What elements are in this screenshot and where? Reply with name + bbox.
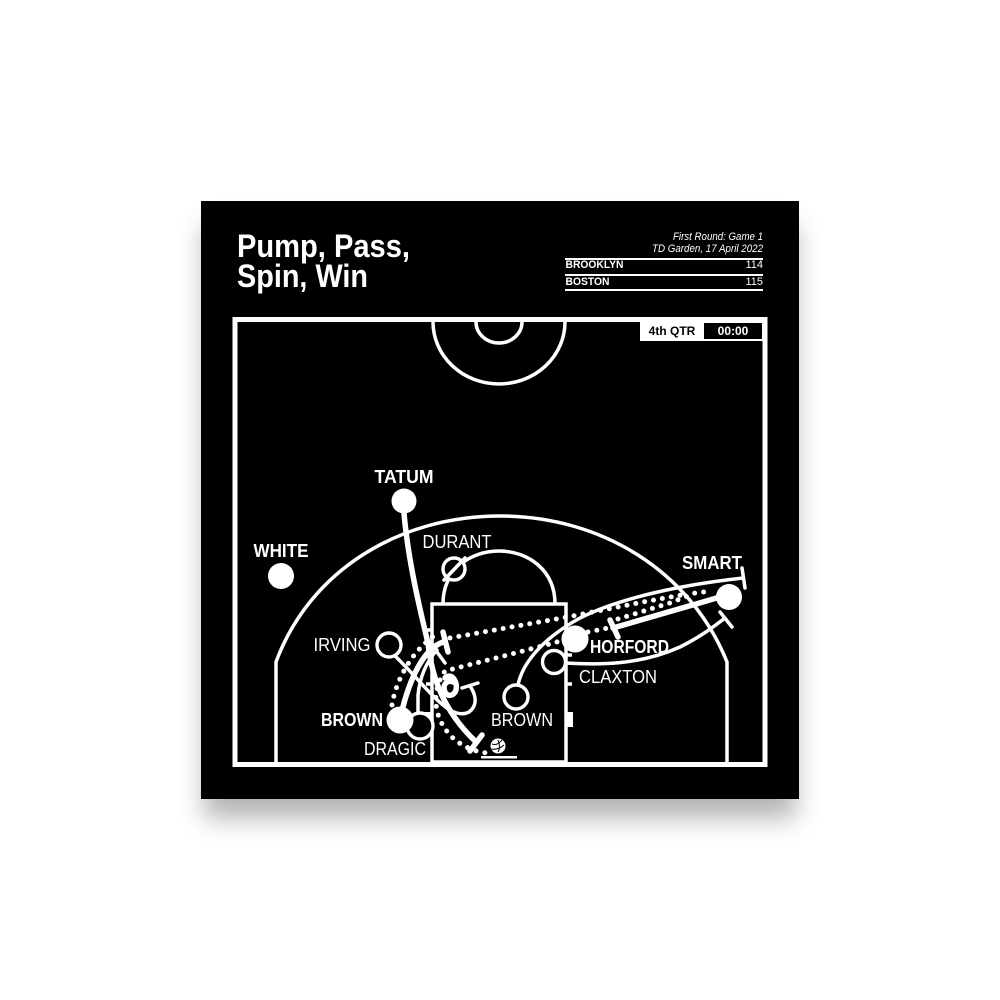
- player: Dragic: DRAGIC: [364, 739, 426, 759]
- scoreboard: [565, 258, 763, 291]
- player: Smart: SMART: [682, 553, 742, 573]
- player movement lines: [394, 513, 745, 751]
- player: Brown defender: BROWN: [491, 710, 553, 730]
- scoreboard: 115: [745, 276, 763, 288]
- player: White: WHITE: [254, 541, 308, 561]
- spiral: [444, 676, 456, 695]
- player: Dragic: [364, 713, 433, 759]
- scoreboard: BROOKLYN: [566, 259, 624, 271]
- court lines: [235, 320, 765, 764]
- player: Brown defender: [491, 685, 553, 730]
- scoreboard: BOSTON: [566, 276, 610, 288]
- Irving path: [394, 655, 478, 714]
- quarter and clock: 00:00: [718, 324, 749, 338]
- player: Irving: [314, 633, 401, 657]
- player: Brown: [321, 706, 414, 734]
- Smart line: [610, 597, 720, 637]
- player: Durant: DURANT: [422, 532, 492, 552]
- Tatum cut: [404, 513, 482, 751]
- player: Brown: BROWN: [321, 710, 383, 730]
- Brown long curve: [518, 568, 745, 685]
- player: White: [254, 541, 308, 589]
- player: Durant: [422, 532, 492, 580]
- poster background: [201, 201, 799, 799]
- player: Claxton: CLAXTON: [579, 667, 657, 687]
- title: [237, 228, 410, 294]
- quarter and clock: [640, 322, 764, 341]
- player: Tatum: TATUM: [374, 467, 434, 487]
- dotted pass paths: [392, 591, 712, 753]
- Brown cut: [400, 632, 448, 720]
- player: Horford: [562, 626, 669, 657]
- Claxton line: [566, 612, 732, 664]
- title: Pump, Pass,: [237, 228, 410, 264]
- Dragic path: [418, 650, 445, 716]
- quarter and clock: 4th QTR: [649, 324, 696, 338]
- game info: TD Garden, 17 April 2022: [652, 243, 763, 255]
- scoreboard: 114: [745, 259, 763, 271]
- game info: [652, 231, 763, 255]
- player: Claxton: [542, 650, 657, 687]
- player: Horford: HORFORD: [590, 637, 669, 657]
- title: Spin, Win: [237, 258, 368, 294]
- player: Irving: IRVING: [314, 635, 370, 655]
- player: Tatum: [374, 467, 434, 514]
- player: Smart: [682, 553, 742, 610]
- game info: First Round: Game 1: [673, 231, 763, 243]
- basket and ball: [481, 738, 517, 758]
